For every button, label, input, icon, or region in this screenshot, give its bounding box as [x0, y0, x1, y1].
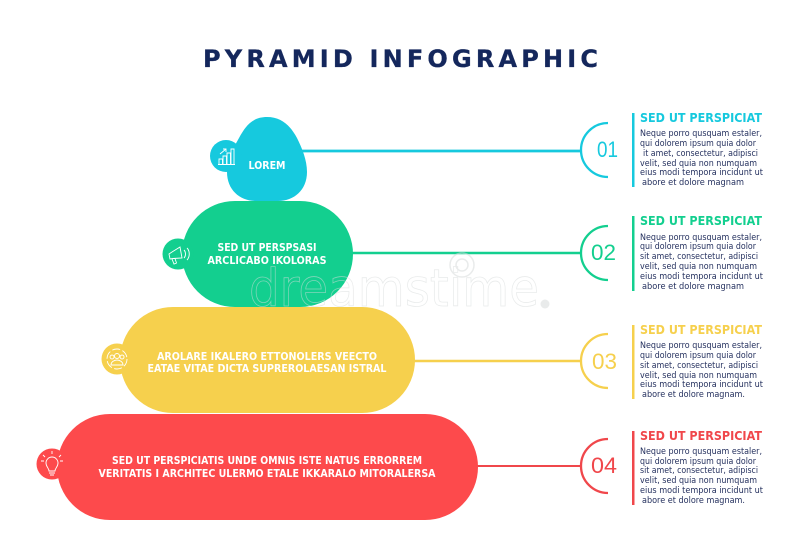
connector line 2 [350, 252, 581, 254]
text block 01: abore et dolore magnam [642, 178, 744, 188]
label: LOREM [248, 160, 286, 172]
text block 03: SED UT PERSPICIAT [640, 322, 762, 337]
text block 01: Neque porro qusquam estaler, [640, 129, 762, 139]
pyramid level 2: green: ARCLICABO IKOLORAS [208, 255, 326, 267]
marker 01 [581, 123, 618, 177]
marker 03: 03 [592, 349, 617, 374]
label: SED UT PERSPICIATIS UNDE OMNIS ISTE NATUS ERRORREM [112, 455, 422, 467]
text block 01: eius modi tempora incidunt ut [640, 168, 764, 178]
icon: light bulb [36, 448, 68, 480]
text block 03: sit amet, consectetur, adipisci [640, 361, 758, 371]
marker 04: 04 [591, 453, 617, 478]
connector line 4 [475, 465, 581, 467]
marker 04 [581, 439, 617, 493]
text block 02: qui dolorem ipsum quia dolor [640, 242, 756, 252]
pyramid level 3: yellow [102, 307, 415, 413]
pyramid level 3: yellow: EATAE VITAE DICTA SUPREROLAESAN ISTRAL [148, 363, 387, 375]
text block 04: qui dolorem ipsum quia dolor [640, 457, 756, 467]
text block 02: sit amet, consectetur, adipisci [640, 252, 758, 262]
text block 03: abore et dolore magnam. [642, 390, 745, 400]
pyramid level 4: red [36, 414, 478, 520]
label: AROLARE IKALERO ETTONOLERS VEECTO [157, 351, 377, 363]
text block 02: Neque porro qusquam estaler, [640, 233, 762, 243]
text block 02 [632, 213, 764, 292]
text block 01 [632, 110, 764, 188]
text block 04: velit, sed quia non numquam [640, 476, 757, 486]
text block 03: qui dolorem ipsum quia dolor [640, 351, 756, 361]
label: SED UT PERSPSASI [218, 242, 316, 254]
icon: team [102, 344, 132, 374]
pyramid level 1: blue [210, 117, 307, 201]
text block 04: Neque porro qusquam estaler, [640, 447, 762, 457]
text block 03: Neque porro qusquam estaler, [640, 341, 762, 351]
text block 04: sit amet, consectetur, adipisci [640, 466, 758, 476]
text block 04 [632, 428, 764, 506]
text block 02: SED UT PERSPICIAT [640, 213, 762, 228]
text block 01: qui dolorem ipsum quia dolor [640, 139, 756, 149]
text block 04: eius modi tempora incidunt ut [640, 486, 764, 496]
text block 03: velit, sed quia non numquam [640, 371, 757, 381]
text block 02: eius modi tempora incidunt ut [640, 272, 764, 282]
title: PYRAMID INFOGRAPHIC [203, 45, 598, 73]
connector line 3 [412, 360, 581, 362]
icon: megaphone [162, 238, 194, 270]
watermark: dreamstime [249, 259, 539, 319]
pyramid level 4: red: VERITATIS I ARCHITEC ULERMO ETALE IKKARALO MITORALERSA [98, 468, 436, 480]
connector line 1 [298, 150, 581, 152]
icon: bar chart [210, 140, 242, 172]
text block 01: SED UT PERSPICIAT [640, 110, 762, 125]
pyramid level 2: green [162, 201, 353, 307]
text block 03: eius modi tempora incidunt ut [640, 380, 764, 390]
text block 04: SED UT PERSPICIAT [640, 428, 762, 443]
text block 03 [632, 322, 764, 400]
text block 04: abore et dolore magnam. [642, 496, 745, 506]
text block 01: it amet, consectetur, adipisci [643, 149, 758, 159]
marker 01: 01 [597, 137, 618, 162]
text block 01: velit, sed quia non numquam [640, 159, 757, 169]
marker 02 [581, 226, 616, 280]
marker 02: 02 [591, 240, 616, 265]
text block 02: velit, sed quia non numquam [640, 262, 757, 272]
text block 02: abore et dolore magnam [642, 282, 744, 292]
marker 03 [581, 334, 617, 388]
